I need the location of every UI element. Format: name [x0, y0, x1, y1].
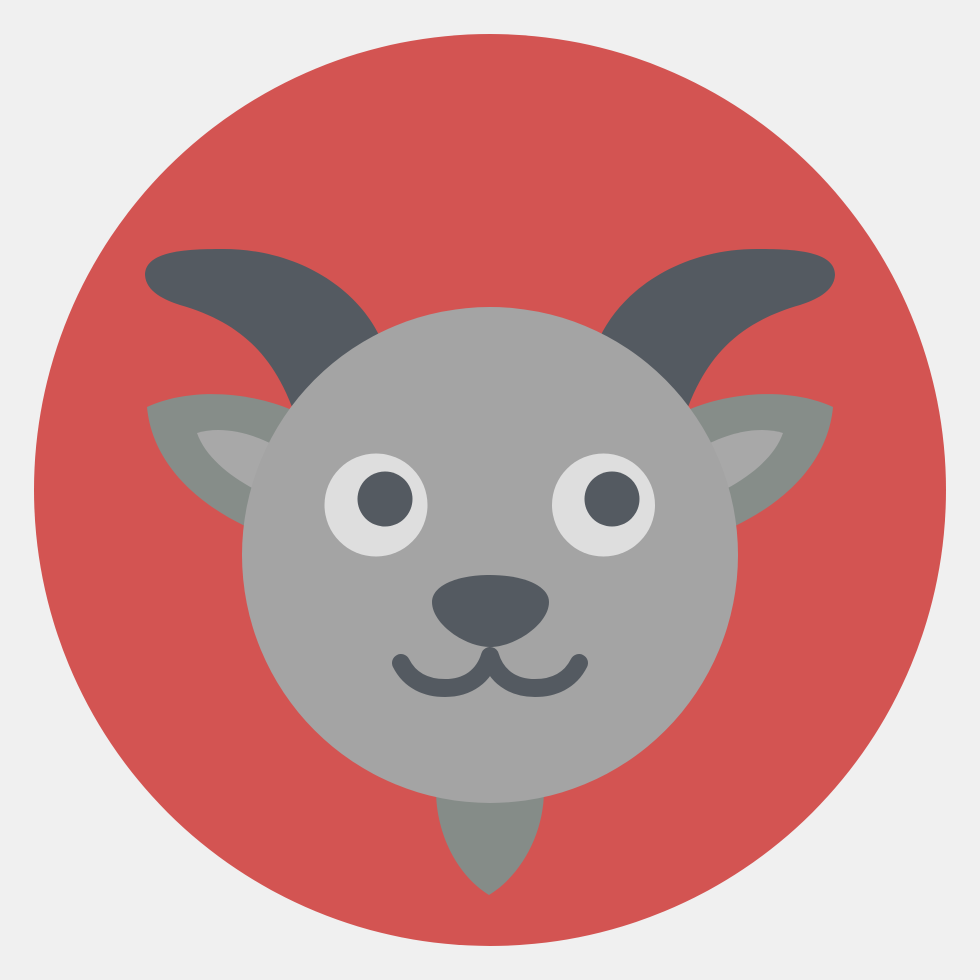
icon: head [242, 307, 738, 803]
icon: nose [432, 575, 549, 647]
icon: right eye [552, 454, 655, 556]
icon: right ear [688, 394, 833, 526]
icon: left eye [324, 454, 428, 556]
icon: mouth [401, 656, 579, 688]
icon: right horn [600, 249, 835, 407]
icon: left horn [145, 249, 380, 407]
icon: beard [436, 790, 544, 895]
goat [145, 249, 835, 895]
icon: left ear [147, 394, 292, 526]
